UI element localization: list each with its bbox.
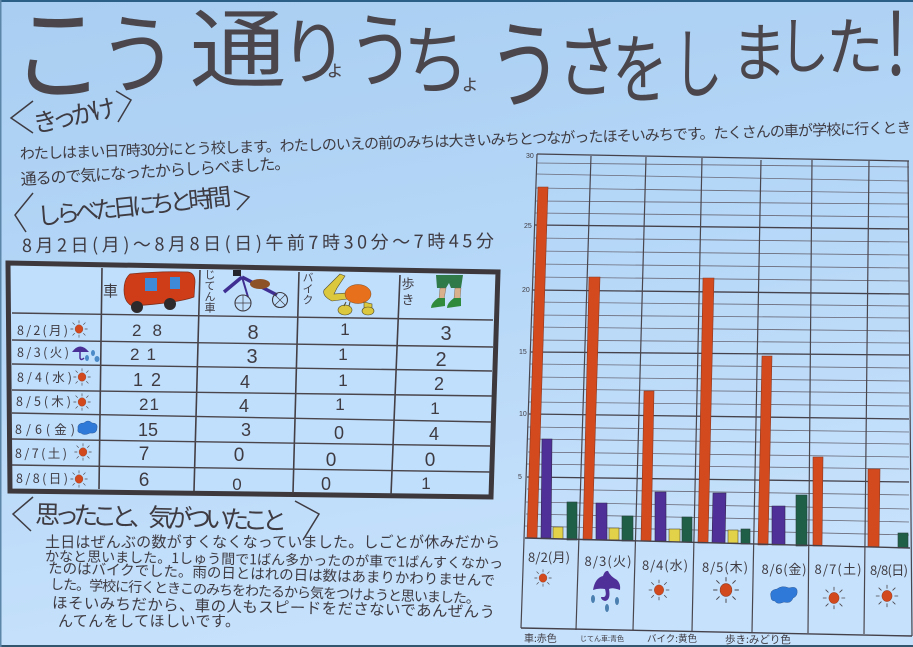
row: 8/4: 2 <box>434 374 444 394</box>
text block: survey dates and times: 8月2日(月)〜8月8日(日)午前7時30分〜7時45分 <box>22 227 494 258</box>
table rows <box>15 320 452 494</box>
axis labels: 15 <box>519 349 527 356</box>
icon: bicycle: じてん車 <box>202 269 218 314</box>
row: 8/6 <box>15 419 439 444</box>
traffic count table <box>8 263 498 497</box>
row: 8/5: 1 <box>335 395 345 414</box>
text block: findings: 土日はぜんぶの数がすくなくなっていました。しごとが休みだから <box>45 531 500 552</box>
legend: じてん車:青色 <box>580 634 624 644</box>
row: 8/8 <box>16 468 431 494</box>
row: 8/5: 4 <box>239 396 249 416</box>
icon: motorbike: バイク <box>300 272 316 305</box>
legend: 歩き:みどり色 <box>725 632 791 647</box>
legend: 車:赤色 <box>524 630 557 645</box>
row: 8/5 <box>16 391 440 418</box>
title: ま <box>731 2 787 95</box>
row: 8/2: 8 <box>247 322 259 344</box>
title <box>12 0 907 128</box>
text block: findings: んてんをしてほしいです。 <box>58 610 240 631</box>
text block: findings: した。学校に行くときこのみちをわたるから気をつけようと思いました。 <box>50 574 480 608</box>
bars: walking (green) <box>567 495 908 548</box>
day 8/6 <box>762 559 806 603</box>
row: 8/7: 0 <box>425 450 435 471</box>
title: さ <box>557 0 619 114</box>
table grid <box>8 263 498 497</box>
text block: reason line 1: わたしはまい日7時30分にとう校します。わたしのいえの前のみちは大きいみちとつながったほそいみちです。たくさんの車が学校に行くとき <box>20 117 912 164</box>
day 8/7: 8/7(土) <box>814 559 862 578</box>
title: ょ <box>460 67 480 96</box>
row: 8/4: 1 <box>338 371 348 390</box>
heading: きっかけ: きっかけ <box>29 88 119 141</box>
heading: しらべた日にちと時間: しらべた日にちと時間 <box>35 177 233 232</box>
chart grid <box>521 154 912 636</box>
row: 8/8: 0 <box>232 475 242 494</box>
day 8/5: 8/5(木) <box>702 557 748 576</box>
row: 8/2: 3 <box>440 323 452 345</box>
day 8/4: 8/4(水) <box>642 555 688 574</box>
bars: car (red) <box>527 187 880 547</box>
axis labels <box>518 153 534 481</box>
title: を <box>612 11 668 120</box>
row: 8/2: 8/2(月) <box>17 320 68 339</box>
text block: findings: たのはバイクでした。雨の日とはれの日は数はあまりかわりませんで <box>48 557 495 590</box>
row: 8/7: 0 <box>326 450 336 471</box>
day 8/6: 8/6(金) <box>762 559 806 578</box>
row: 8/3: 1 <box>338 345 348 364</box>
row: 8/3: 3 <box>246 346 258 368</box>
row: 8/3 <box>17 342 447 371</box>
row: 8/2 <box>17 320 452 345</box>
axis labels: 20 <box>522 287 530 294</box>
weather row <box>528 547 908 612</box>
bars: bicycle (purple) <box>541 439 785 545</box>
row: 8/4: 8/4(水) <box>17 367 72 386</box>
text block: findings: ほそいみちだから、車の人もスピードをださないであんぜんう <box>52 591 495 622</box>
title: ょ <box>325 53 345 82</box>
day 8/5 <box>702 557 748 603</box>
day 8/7 <box>814 559 862 609</box>
title: し <box>674 3 722 115</box>
row: 8/6: 8/6(金) <box>15 419 75 438</box>
row: 8/8: 0 <box>321 474 331 494</box>
row: 8/3: 8/3(火) <box>17 342 69 361</box>
text block: findings <box>45 531 503 631</box>
day 8/3 <box>584 551 632 612</box>
title: し <box>779 0 829 87</box>
row: 8/4: 4 <box>240 372 250 392</box>
row: 8/6: 15 <box>138 420 158 440</box>
row: 8/2: 2 8 <box>132 321 162 340</box>
title: ち <box>403 2 469 110</box>
row: 8/6: 4 <box>429 424 439 444</box>
text block: findings: かなと思いました。1しゅう間で1ばん多かったのが車で1ばんすくなかっ <box>45 546 503 573</box>
row: 8/5: 21 <box>139 395 159 414</box>
icon: motorbike <box>300 272 374 315</box>
icon: car <box>103 272 195 313</box>
icon: bicycle <box>202 269 288 314</box>
axis labels: 25 <box>524 223 532 230</box>
day 8/3: 8/3(火) <box>584 551 632 570</box>
text block: reason line 2: 通るので気になったからしらべました。 <box>20 150 291 190</box>
row: 8/4 <box>17 367 444 394</box>
row: 8/8: 8/8(日) <box>16 468 68 487</box>
row: 8/2: 1 <box>340 320 350 339</box>
row: 8/8: 6 <box>139 470 149 491</box>
axis labels: 10 <box>519 411 527 418</box>
row: 8/5: 8/5(木) <box>16 391 71 410</box>
legend <box>524 630 791 647</box>
legend: バイク:黄色 <box>647 631 697 645</box>
icon: walker: 歩き <box>398 277 418 309</box>
bar chart: traffic counts by day <box>518 153 912 647</box>
icon: walker <box>398 275 463 309</box>
day 8/2 <box>528 547 570 587</box>
row: 8/3: 2 <box>435 349 447 371</box>
row: 8/7 <box>15 443 435 471</box>
row: 8/4: 1 2 <box>133 370 161 390</box>
row: 8/8: 1 <box>421 474 431 493</box>
row: 8/3: 2 1 <box>130 345 156 364</box>
row: 8/7: 0 <box>234 445 244 466</box>
row: 8/7: 7 <box>139 444 149 465</box>
axis labels: 5 <box>518 474 522 481</box>
icon: car: 車 <box>103 280 118 301</box>
row: 8/5: 1 <box>430 399 440 418</box>
bars: motorbike (yellow) <box>553 527 738 543</box>
row: 8/6: 3 <box>241 420 251 440</box>
row: 8/6: 0 <box>334 423 344 443</box>
day 8/4 <box>642 555 688 600</box>
day 8/2: 8/2(月) <box>528 547 570 566</box>
day 8/8: 8/8(日) <box>870 560 908 579</box>
axis labels: 30 <box>526 153 534 160</box>
heading: 思ったこと、気がついたこと: 思ったこと、気がついたこと <box>35 495 288 538</box>
chart baseline and weather row border <box>521 538 912 636</box>
day 8/8 <box>870 560 908 607</box>
row: 8/7: 8/7(土) <box>15 443 67 462</box>
